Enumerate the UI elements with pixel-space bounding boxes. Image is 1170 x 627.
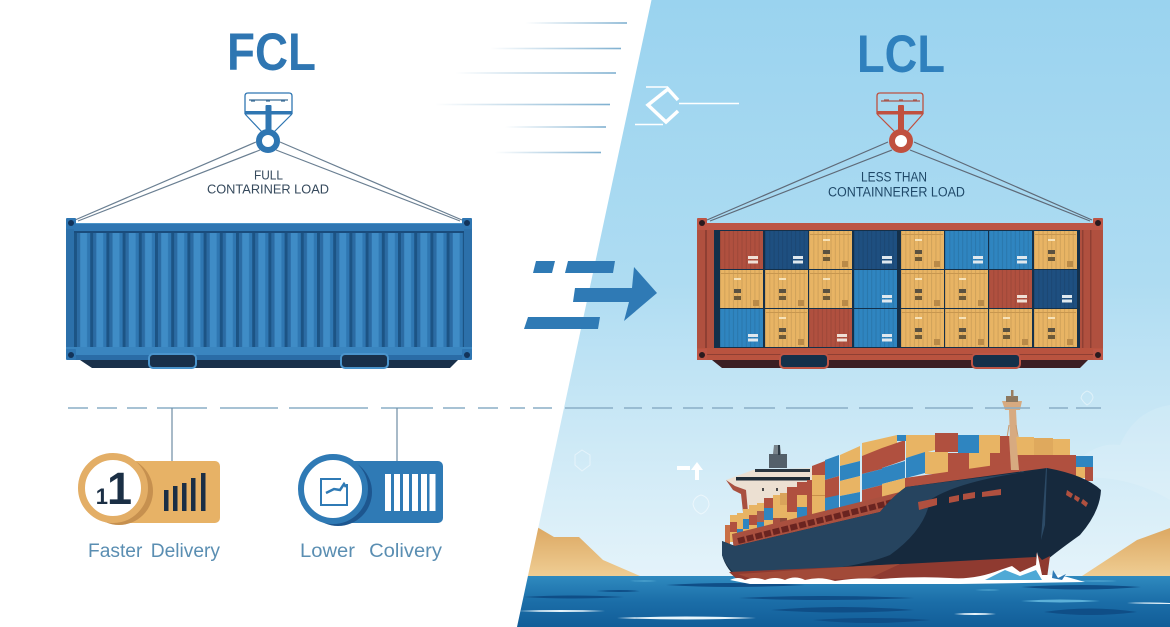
label: full container load: FULL bbox=[254, 168, 283, 182]
illustration: ship hull bbox=[722, 468, 1101, 582]
decorative speed lines bbox=[435, 22, 627, 153]
icon: faint marker top right bbox=[1081, 391, 1093, 405]
label: full container load: CONTARINER LOAD bbox=[207, 182, 329, 196]
icon: faster delivery badge: 1 bbox=[96, 484, 108, 509]
illustration: bow wave bbox=[730, 552, 1085, 584]
label: lower colivery: Lower Colivery bbox=[300, 541, 443, 562]
icon: faint map pin on sky bbox=[693, 495, 709, 514]
LCL red container frame bbox=[697, 218, 1103, 368]
title: LCL: LCL bbox=[857, 25, 945, 84]
icon: faster delivery badge: 1 bbox=[107, 463, 132, 514]
illustration: ship rear mast over stack bbox=[1009, 436, 1019, 470]
illustration: ship deck rail bbox=[732, 490, 908, 551]
icon: white arrow on sky bbox=[677, 462, 703, 480]
dashed divider bbox=[68, 407, 1101, 409]
LCL small cargo containers bbox=[720, 231, 1077, 347]
arrow: FCL to LCL bbox=[524, 261, 657, 329]
illustration: right hill bbox=[1082, 528, 1170, 576]
FCL blue container bbox=[66, 218, 472, 368]
FCL lifting slings bbox=[75, 142, 462, 221]
label: faster delivery: Faster Delivery bbox=[88, 541, 221, 562]
label: less than container load: CONTAINNERER LOAD bbox=[828, 184, 965, 200]
connector lines bbox=[172, 408, 397, 462]
illustration: sea with streaks bbox=[500, 576, 1170, 627]
icon: white diamond outline bbox=[635, 87, 739, 124]
label: less than container load: LESS THAN bbox=[861, 170, 927, 184]
FCL crane hook bbox=[245, 93, 292, 150]
LCL lifting slings bbox=[707, 142, 1092, 221]
icon: faint hexagon on sky bbox=[575, 450, 590, 471]
illustration: ship superstructure bbox=[726, 445, 812, 512]
LCL crane hook bbox=[877, 93, 923, 150]
illustration: ship container stacks bbox=[725, 433, 1093, 545]
icon: lower cost badge bbox=[301, 457, 443, 526]
panel: FCL white background bbox=[0, 0, 652, 627]
illustration: rear mast bbox=[1002, 390, 1024, 470]
illustration: left hill bbox=[527, 527, 640, 576]
icon: faster delivery badge bbox=[82, 456, 220, 525]
title: FCL: FCL bbox=[227, 23, 316, 82]
illustration: clouds on the right bbox=[1060, 405, 1170, 500]
